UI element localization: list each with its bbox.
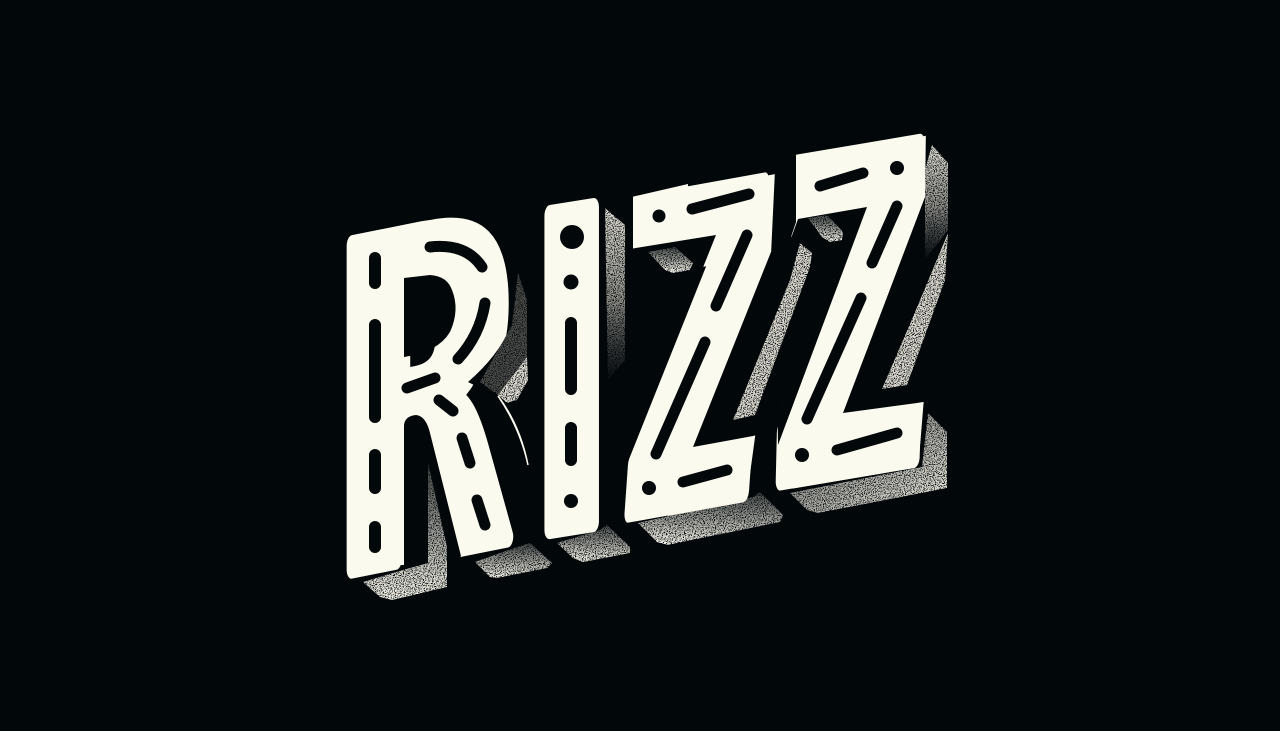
title word: RIZZ: I <box>528 118 615 634</box>
dash details on first Z <box>642 194 749 495</box>
title word: RIZZ <box>346 134 926 579</box>
letter counters and notches <box>404 125 950 580</box>
dash details on second Z <box>795 161 904 462</box>
poster canvas <box>346 134 948 600</box>
title word: RIZZ: Z <box>651 98 804 607</box>
dash details on R <box>375 246 485 547</box>
title word: RIZZ: R <box>332 122 532 679</box>
title word: RIZZ: Z <box>777 56 956 581</box>
title word: RIZZ: R <box>330 125 513 679</box>
dash details on I <box>560 225 584 508</box>
title word: RIZZ: Z <box>614 98 781 615</box>
thin highlight curve under R bowl <box>498 396 528 465</box>
title word: RIZZ: Z <box>769 57 933 585</box>
stippled extrusion shadows <box>363 145 948 600</box>
